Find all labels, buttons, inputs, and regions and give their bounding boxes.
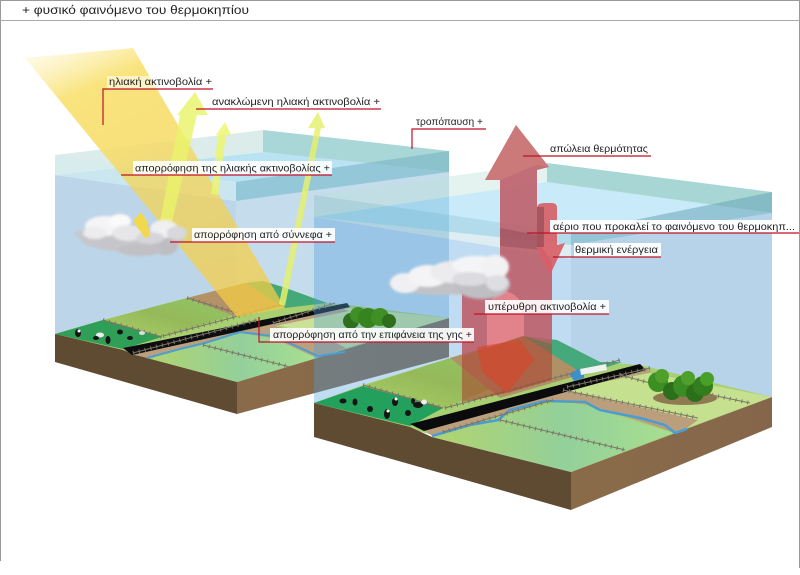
label: solar radiation: ηλιακή ακτινοβολία + [109, 76, 212, 88]
tree cluster of the left block [343, 307, 396, 329]
darker band in the shaft [500, 228, 543, 250]
overlap of thermal arrow and shaft [537, 207, 544, 247]
tropopause back left wall [55, 130, 263, 175]
trees [648, 369, 714, 402]
absorbed sunlight in the cloud [133, 212, 150, 238]
label: greenhouse gas: αέριο που προκαλεί το φαινόμενο του θερμοκηπ... [553, 221, 795, 233]
dirt strip [123, 309, 349, 358]
tropopause front right face [571, 192, 772, 245]
tropopause slab interior [55, 152, 449, 201]
reflected solar radiation, large arrow [160, 92, 208, 222]
title: + φυσικό φαινόμενο του θερμοκηπίου [22, 3, 249, 17]
label: absorption by the earth's surface [259, 317, 474, 342]
label: absorption by the earth's surface: απορρόφηση από την επιφάνεια της γης + [273, 329, 472, 341]
front field [432, 403, 673, 472]
label: thermal energy: θερμική ενέργεια [575, 244, 658, 256]
road [410, 364, 646, 431]
soil left side [55, 334, 237, 414]
cows [340, 398, 427, 419]
label: tropopause [412, 116, 486, 149]
label: absorption of solar radiation [121, 161, 332, 175]
label: tropopause: τροπόπαυση + [416, 116, 483, 128]
label: reflected solar radiation: ανακλώμενη ηλιακή ακτινοβολία + [212, 96, 380, 108]
label: heat loss: απώλεια θερμότητας [550, 143, 648, 155]
fences [363, 360, 750, 450]
fences [103, 298, 335, 367]
tropopause front left face [55, 155, 236, 201]
front field [147, 333, 317, 382]
label: absorption of solar radiation: απορρόφηση της ηλιακής ακτινοβολίας + [135, 162, 330, 174]
label: heat loss [523, 143, 651, 156]
right atmosphere right face [571, 213, 772, 472]
stream [147, 332, 345, 358]
main rising heat arrow [462, 125, 552, 356]
tropopause slab interior [314, 182, 772, 245]
tropopause back left wall [314, 163, 547, 217]
panel: right block atmosphere [314, 163, 772, 472]
panel: right block ground [314, 336, 772, 510]
right field [275, 308, 449, 348]
label: infrared radiation: υπέρυθρη ακτινοβολία + [488, 301, 606, 313]
road [123, 303, 350, 355]
left ground base [55, 283, 449, 382]
stream [432, 401, 687, 436]
soil right side [237, 318, 449, 414]
ploughed field [450, 336, 590, 398]
cloud, right block [389, 255, 510, 299]
truck [570, 364, 607, 381]
pasture [55, 320, 162, 349]
olive hillside [363, 358, 530, 408]
panel: left block ground [55, 281, 449, 414]
ploughed field [187, 283, 283, 317]
reflected solar radiation, medium arrow [211, 122, 231, 195]
olive hillside [103, 298, 237, 337]
dirt strip [422, 368, 698, 436]
green hilltop [523, 336, 622, 375]
tropopause back right wall [263, 130, 449, 172]
lighter infrared arrow [487, 292, 524, 349]
label: reflected solar radiation [196, 96, 382, 109]
label: thermal energy [553, 243, 661, 257]
left atmosphere right face [236, 172, 449, 382]
tropopause back right wall [547, 163, 772, 213]
right atmosphere left face [314, 217, 571, 472]
heat over the ground [462, 336, 552, 402]
tropopause front right face [236, 151, 449, 201]
left atmosphere left face [55, 175, 237, 382]
right field [563, 373, 772, 428]
tree shadow [653, 391, 717, 405]
soil left side [314, 403, 571, 510]
cloud, left block [75, 212, 187, 256]
infrared radiation shaft [462, 125, 565, 402]
arrow head highlight [485, 125, 549, 180]
cows [75, 329, 145, 344]
pasture [314, 386, 443, 426]
label: absorption by clouds: απορρόφηση από σύννεφα + [194, 229, 332, 241]
downward thermal energy arrow [536, 203, 565, 275]
absorbed heat on the ground [477, 340, 534, 393]
green hilltop [245, 281, 327, 308]
tropopause front left face [314, 195, 571, 259]
right ground base [314, 336, 772, 472]
panel: left block, natural sunlight atmosphere [55, 130, 449, 382]
label: absorption by clouds [170, 228, 335, 242]
label: greenhouse gas [527, 220, 799, 233]
soil right side [571, 397, 772, 510]
label: infrared radiation [474, 300, 609, 314]
reflected solar radiation, thin arrow [279, 112, 325, 306]
solar radiation beam [25, 48, 285, 317]
label: solar radiation [103, 76, 214, 125]
